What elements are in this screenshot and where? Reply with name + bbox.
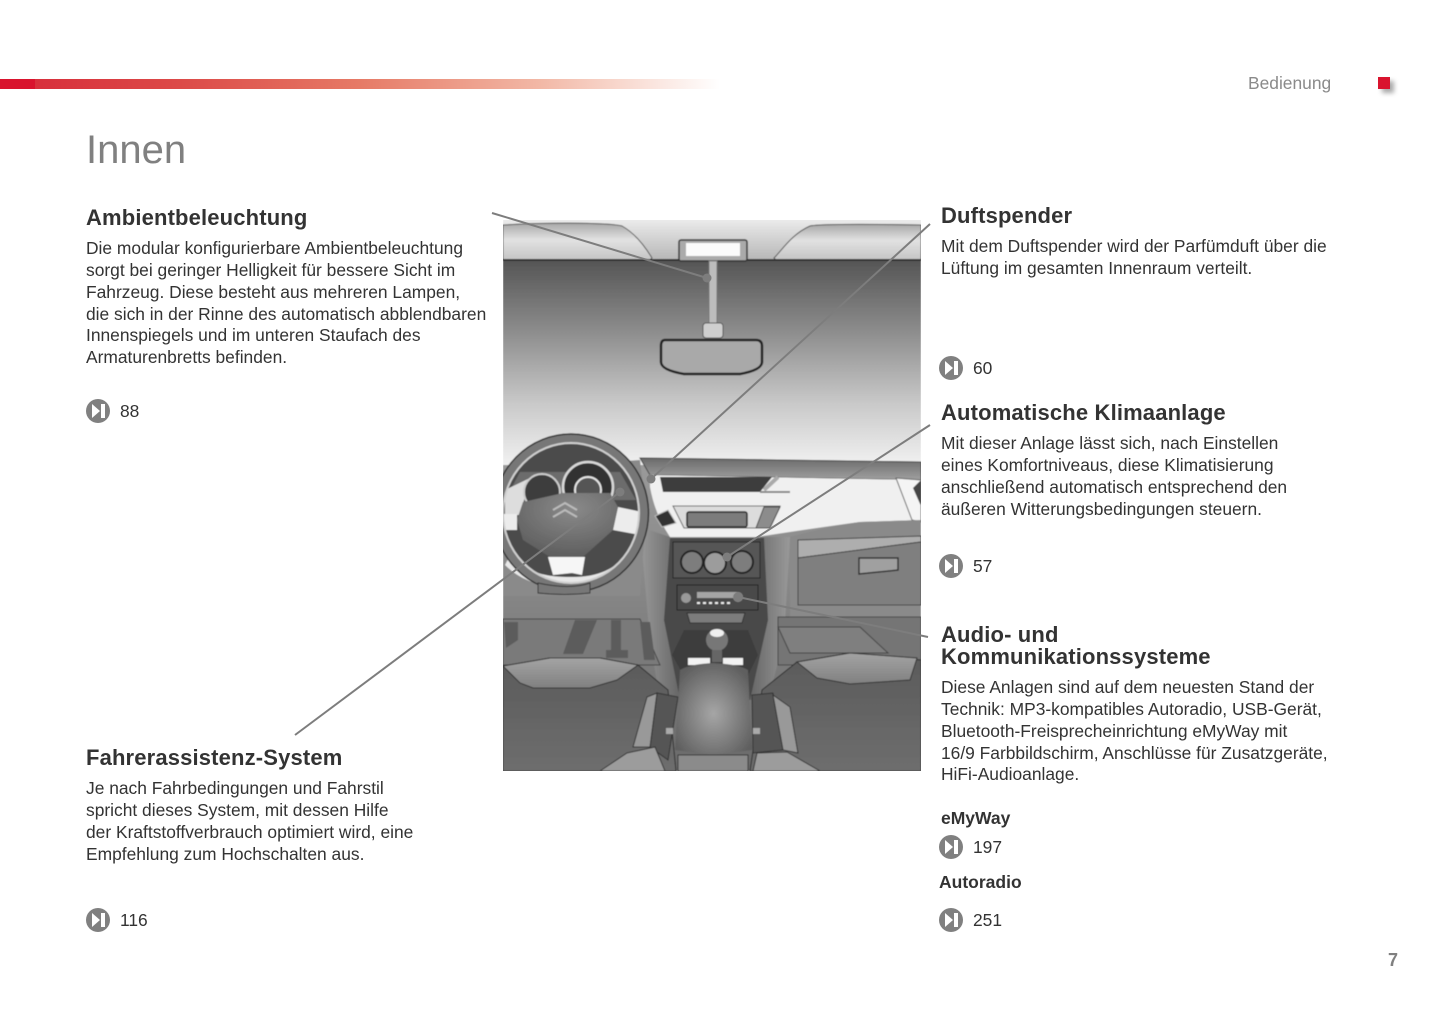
text: Automatische Klimaanlage: Mit dieser Anlage lässt sich, nach Einstellen <box>941 433 1278 453</box>
text: Ambientbeleuchtung: Die modular konfigurierbare Ambientbeleuchtung <box>86 238 463 258</box>
text: Fahrerassistenz-System <box>86 778 413 864</box>
lower cabin <box>503 465 921 771</box>
text: Audio- und Kommunikationssysteme: 16/9 Farbbildschirm, Anschlüsse für Zusatzgeräte, <box>941 743 1328 763</box>
label: Autoradio: Autoradio <box>939 872 1022 892</box>
text: Ambientbeleuchtung: Fahrzeug. Diese besteht aus mehreren Lampen, <box>86 282 460 302</box>
text: Duftspender: Mit dem Duftspender wird der Parfümduft über die <box>941 236 1327 256</box>
text: Fahrerassistenz-System: der Kraftstoffverbrauch optimiert wird, eine <box>86 822 413 842</box>
page reference: 60: 60 <box>973 358 992 378</box>
text: Ambientbeleuchtung: Innenspiegels und im unteren Staufach des <box>86 325 421 345</box>
steering wheel <box>494 434 648 596</box>
text: Automatische Klimaanlage: anschließend automatisch entsprechend den <box>941 477 1287 497</box>
page reference: 57: 57 <box>973 556 992 576</box>
line: climate <box>722 425 930 562</box>
page reference: 88: 88 <box>120 401 139 421</box>
page reference: 116 <box>86 908 148 932</box>
heading: Fahrerassistenz-System: Fahrerassistenz-System <box>86 745 342 770</box>
text: Audio- und Kommunikationssysteme <box>941 677 1328 784</box>
text: Audio- und Kommunikationssysteme: Technik: MP3-kompatibles Autoradio, USB-Gerät, <box>941 699 1322 719</box>
text: Audio- und Kommunikationssysteme: HiFi-Audioanlage. <box>941 764 1079 784</box>
label: eMyWay: eMyWay <box>941 808 1010 828</box>
line: fragrance dispenser <box>646 224 930 484</box>
text: Ambientbeleuchtung: sorgt bei geringer Helligkeit für bessere Sicht im <box>86 260 455 280</box>
section label: Bedienung <box>1248 73 1331 93</box>
rear bench <box>678 755 748 771</box>
page reference: 251 <box>939 908 1002 932</box>
text: Ambientbeleuchtung: Armaturenbretts befinden. <box>86 347 287 367</box>
callout lines <box>295 213 930 735</box>
page reference: 251: 251 <box>973 910 1002 930</box>
right seat <box>750 653 921 771</box>
heading: Ambientbeleuchtung: Ambientbeleuchtung <box>86 205 307 230</box>
page reference: 116: 116 <box>120 910 148 930</box>
text: Fahrerassistenz-System: Empfehlung zum Hochschalten aus. <box>86 844 364 864</box>
text: Duftspender <box>941 236 1327 278</box>
heading: Automatische Klimaanlage: Automatische Klimaanlage <box>941 400 1226 425</box>
text: Audio- und Kommunikationssysteme: Diese Anlagen sind auf dem neuesten Stand der <box>941 677 1314 697</box>
line: audio <box>734 592 928 637</box>
footwell carpets <box>503 617 921 665</box>
page reference: 57 <box>939 554 992 578</box>
text: Automatische Klimaanlage: äußeren Witterungsbedingungen steuern. <box>941 499 1262 519</box>
dashboard <box>640 458 921 537</box>
page reference: 88 <box>86 399 139 423</box>
panel: car interior illustration <box>294 212 931 771</box>
armrest <box>675 663 752 755</box>
heading: Audio- und Kommunikationssysteme <box>941 622 1211 669</box>
heading: Duftspender: Duftspender <box>941 203 1072 228</box>
header bar <box>0 79 720 89</box>
text: Ambientbeleuchtung <box>86 238 486 367</box>
left seat <box>503 658 678 771</box>
heading: Audio- und Kommunikationssysteme: Audio- und <box>941 622 1059 647</box>
text: Ambientbeleuchtung: die sich in der Rinne des automatisch abblendbaren <box>86 304 486 324</box>
text: Fahrerassistenz-System: Je nach Fahrbedingungen und Fahrstil <box>86 778 384 798</box>
headliner and sun visors <box>503 219 921 261</box>
center console <box>640 527 790 700</box>
line: driver assistance <box>295 488 624 735</box>
glove box <box>797 520 921 606</box>
page number: 7 <box>1388 950 1398 970</box>
text: Automatische Klimaanlage <box>941 433 1287 519</box>
page reference: 197 <box>939 835 1002 859</box>
text: Duftspender: Lüftung im gesamten Innenraum verteilt. <box>941 258 1252 278</box>
heading: Audio- und Kommunikationssysteme: Kommunikationssysteme <box>941 644 1211 669</box>
page reference: 60 <box>939 356 992 380</box>
text: Fahrerassistenz-System: spricht dieses System, mit dessen Hilfe <box>86 800 389 820</box>
title: Innen <box>86 128 186 172</box>
text: Audio- und Kommunikationssysteme: Bluetooth-Freisprecheinrichtung eMyWay mit <box>941 721 1287 741</box>
line: ambient lighting <box>492 213 712 282</box>
windshield <box>503 260 921 465</box>
rear view mirror <box>661 240 762 374</box>
page reference: 197: 197 <box>973 837 1002 857</box>
red section marker <box>1378 77 1390 89</box>
text: Automatische Klimaanlage: eines Komfortniveaus, diese Klimatisierung <box>941 455 1274 475</box>
